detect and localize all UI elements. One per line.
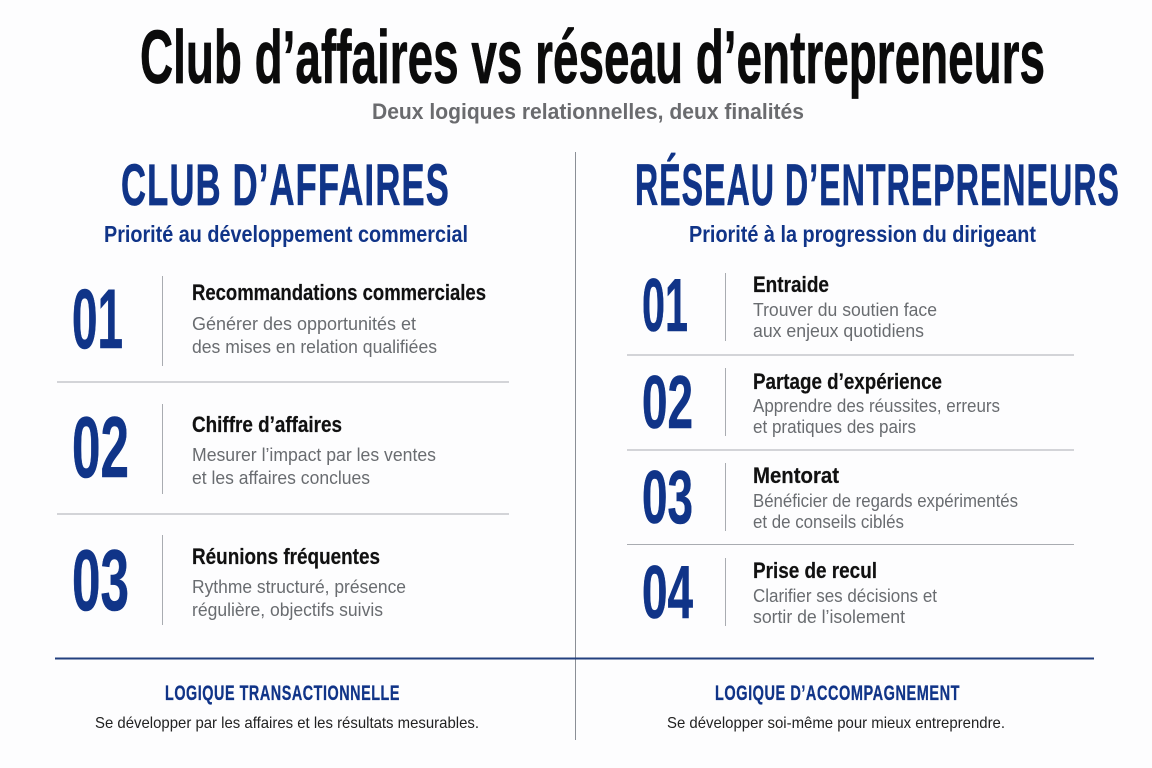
item 03: réunions fréquentes: Rythme structuré, présence (192, 577, 406, 597)
item 01: entraide: 01 (642, 263, 688, 347)
footer: logique d'accompagnement (667, 682, 1005, 732)
item 02: partage d'expérience: Apprendre des réussites, erreurs (753, 396, 1000, 416)
footer: logique transactionnelle: LOGIQUE TRANSACTIONNELLE (165, 682, 400, 705)
item 01: recommandations (72, 272, 486, 366)
item 01: recommandations: des mises en relation qualifiées (192, 337, 437, 357)
item 01: recommandations: 01 (72, 272, 123, 366)
footer: logique d'accompagnement: LOGIQUE D’ACCOMPAGNEMENT (715, 682, 960, 705)
item 02: partage d'expérience (642, 360, 1000, 444)
item 02: chiffre d'affaires (72, 400, 436, 496)
panel: réseau d'entrepreneurs (627, 153, 1120, 634)
item 02: partage d'expérience: 02 (642, 360, 693, 444)
footer: logique d'accompagnement: Se développer soi-même pour mieux entreprendre. (667, 715, 1005, 732)
item 03: réunions fréquentes: régulière, objectifs suivis (192, 600, 383, 620)
item 04: prise de recul: 04 (642, 550, 693, 634)
item 04: prise de recul: Prise de recul (753, 558, 877, 583)
item 02: chiffre d'affaires: et les affaires conclues (192, 468, 370, 488)
item 02: partage d'expérience: Partage d’expérience (753, 369, 942, 394)
item 03: mentorat: et de conseils ciblés (753, 512, 904, 532)
item 02: chiffre d'affaires: Mesurer l’impact par les ventes (192, 445, 436, 465)
item 01: entraide: Trouver du soutien face (753, 300, 937, 320)
panel: club d'affaires (57, 153, 509, 629)
item 01: recommandations: Générer des opportunités et (192, 314, 416, 334)
subheading: réseau d'entrepreneurs: Priorité à la progression du dirigeant (689, 221, 1036, 247)
subtitle: Deux logiques relationnelles, deux finalités (372, 99, 804, 124)
heading: club d'affaires: CLUB D’AFFAIRES (121, 153, 450, 218)
item 03: mentorat: 03 (642, 455, 693, 539)
item 03: réunions fréquentes: 03 (72, 533, 129, 629)
item 03: réunions fréquentes (72, 533, 406, 629)
item 04: prise de recul: sortir de l’isolement (753, 607, 905, 627)
item 03: mentorat: Bénéficier de regards expérimentés (753, 491, 1018, 511)
item 01: entraide: aux enjeux quotidiens (753, 321, 924, 341)
item 01: entraide: Entraide (753, 272, 829, 297)
item 03: mentorat: Mentorat (753, 463, 840, 488)
item 02: chiffre d'affaires: 02 (72, 400, 129, 496)
item 02: chiffre d'affaires: Chiffre d’affaires (192, 412, 342, 437)
subheading: club d'affaires: Priorité au développement commercial (104, 221, 468, 247)
item 01: entraide (642, 263, 937, 347)
item 01: recommandations: Recommandations commerciales (192, 280, 486, 305)
footer: logique transactionnelle (95, 682, 479, 732)
item 04: prise de recul: Clarifier ses décisions et (753, 586, 937, 606)
item 03: mentorat (642, 455, 1018, 539)
item 02: partage d'expérience: et pratiques des pairs (753, 417, 916, 437)
item 03: réunions fréquentes: Réunions fréquentes (192, 544, 380, 569)
footer: logique transactionnelle: Se développer par les affaires et les résultats mesurables. (95, 715, 479, 732)
item 04: prise de recul (642, 550, 937, 634)
